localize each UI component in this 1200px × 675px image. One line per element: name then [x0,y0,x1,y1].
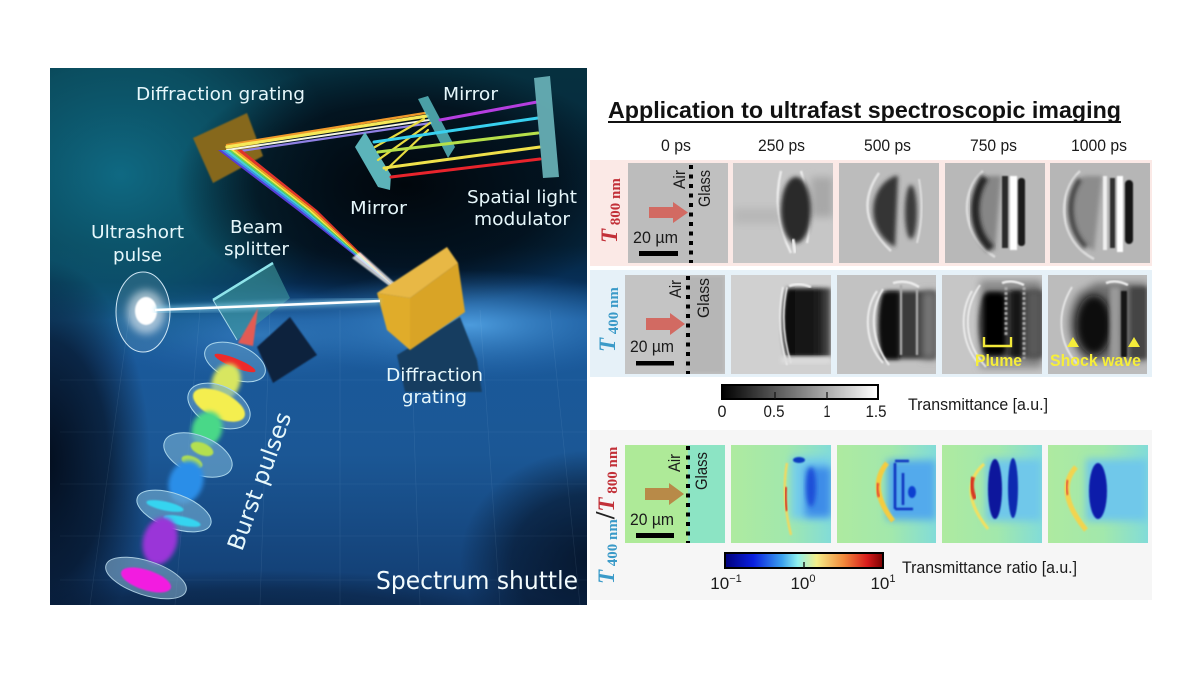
time labels: 750 ps [970,136,1017,155]
image: ratio 750 ps [942,445,1042,543]
label: diffraction grating lower: grating [402,387,467,408]
icon: burst pulse disc magenta [101,549,191,607]
label: burst pulses: Burst pulses [223,409,297,554]
label: T 800 nm: T [597,228,622,243]
image: ratio 0 ps: Glass [692,452,711,490]
image: T400 1000 ps with shock wave annotation: Shock wave [1050,351,1141,370]
icon: burst pulse disc yellow [181,374,257,438]
image: T400 250 ps [731,275,831,374]
icon: yellow-green beam [206,359,246,405]
heading: application title: Application to ultrafast spectroscopic imaging [608,97,1121,123]
label: T 800 nm: 800 nm [608,178,624,229]
colorbar: transmittance: 0 [718,402,726,421]
image: T800 0 ps: Air [670,170,689,189]
colorbar: transmittance [718,385,1048,421]
label: ultrashort pulse: pulse [113,245,162,266]
label: mirror lower: Mirror [350,198,408,219]
image: ratio 0 ps [625,445,725,543]
panel: transmittance ratio row [590,430,1152,600]
icon: spatial light modulator [534,76,559,178]
image: T800 750 ps [945,163,1045,263]
image: ratio 250 ps [731,445,831,543]
image: T400 0 ps: Glass [694,278,713,318]
icon: lower diffraction grating [377,247,465,350]
colorbar: transmittance: 0.5 [764,402,784,421]
image: T800 250 ps [733,163,833,263]
time labels: 500 ps [864,136,911,155]
panel: spectrum shuttle optical setup [50,68,587,605]
image: T800 500 ps [839,163,939,263]
image: T400 750 ps with plume annotation [942,275,1042,374]
label: T 400 nm: 400 nm [606,287,622,338]
label: T400 over T800: T [594,497,619,512]
icon: burst pulse disc cyan [132,482,216,540]
time labels: 1000 ps [1071,136,1127,155]
label: T400 over T800: T [594,569,619,584]
arrow: input white beam [155,301,380,310]
label: T400 over T800: 400 nm [605,519,621,570]
icon: shadows under prism and grating [257,317,482,392]
label: transmittance ratio unit: Transmittance ratio [a.u.] [902,558,1077,577]
label: transmittance unit: Transmittance [a.u.] [908,395,1048,414]
colorbar: transmittance ratio: 10 [710,574,729,593]
colorbar: transmittance ratio [710,553,1077,593]
label: beam splitter [224,217,290,260]
arrow: rainbow dispersed beam [218,150,400,294]
icon: upper mirror [418,96,455,158]
colorbar: transmittance ratio: 10 [870,574,889,593]
arrow: beam from grating to mirror [227,113,431,153]
image: T400 0 ps: 20 µm [630,337,674,356]
icon: beam splitter [213,263,290,340]
icon: purple beam [137,513,183,569]
colorbar: transmittance: 1.5 [866,402,886,421]
colorbar: transmittance ratio: −1 [729,573,742,585]
label: spectrum shuttle: Spectrum shuttle [376,566,578,595]
image: T400 750 ps with plume annotation: Plume [975,351,1022,370]
time labels [661,136,1127,155]
image: T800 1000 ps [1050,163,1150,263]
icon: upper diffraction grating [193,113,263,183]
icon: blue beam [163,456,209,508]
image: ratio 0 ps: 20 µm [630,510,674,529]
image: ratio 500 ps [837,445,936,543]
time labels: 250 ps [758,136,805,155]
colorbar: transmittance: 1 [824,402,830,421]
icon: green beam [187,407,227,451]
image: ratio 1000 ps [1048,445,1148,543]
image: T800 0 ps: 20 µm [633,228,678,247]
label: mirror top: Mirror [443,84,499,105]
label: diffraction grating top: Diffraction grating [136,84,305,105]
image: T400 500 ps [837,275,936,374]
colorbar: transmittance ratio: 0 [809,573,816,585]
label: diffraction grating lower [386,365,483,408]
image: T400 1000 ps with shock wave annotation [1048,275,1147,374]
icon: burst pulse disc green [158,424,238,486]
label: T400 over T800: / [590,511,620,520]
icon: lower mirror [355,132,391,190]
label: beam splitter: splitter [224,239,290,260]
label: beam splitter: Beam [230,217,283,238]
arrow: spectral rays to spatial light modulator [374,102,540,177]
label: spatial light modulator [467,187,577,230]
image: ratio 0 ps: Air [665,454,684,472]
label: T 400 nm: T [595,337,620,352]
label: T400 over T800: 800 nm [605,446,621,498]
icon: burst pulse disc red [199,334,271,390]
icon: ultrashort pulse disc [116,272,170,352]
panel: T400 row [590,270,1152,377]
label: ultrashort pulse [91,222,184,266]
label: diffraction grating lower: Diffraction [386,365,483,386]
icon: red cone beam [238,308,258,346]
image: T400 0 ps [625,275,725,374]
image: T400 0 ps: Air [666,280,685,298]
panel: T800 row [590,160,1152,266]
label: spatial light modulator: Spatial light [467,187,577,208]
colorbar: transmittance ratio: 10 [790,574,809,593]
label: ultrashort pulse: Ultrashort [91,222,184,243]
image: T800 0 ps [628,163,728,263]
time labels: 0 ps [661,136,691,155]
label: spatial light modulator: modulator [474,209,571,230]
image: T800 0 ps: Glass [695,170,714,207]
colorbar: transmittance ratio: 1 [889,573,896,585]
